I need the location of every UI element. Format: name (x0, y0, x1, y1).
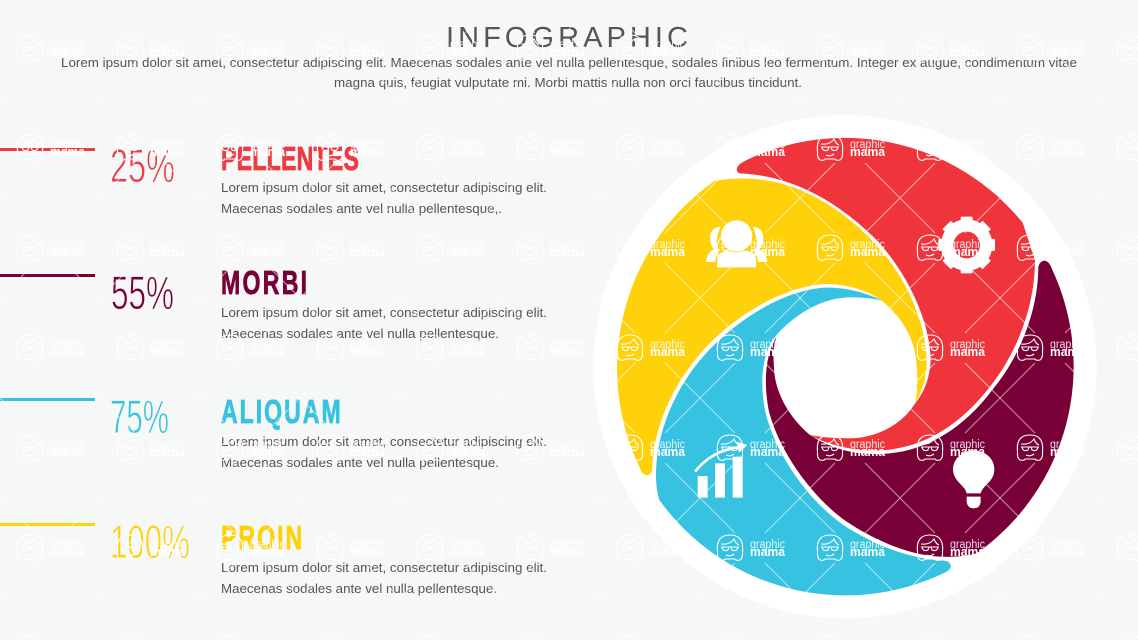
row: Aliquam 75%: Maecenas sodales ante vel nulla pellentesque. (221, 455, 499, 470)
row: Pellentes 25%: 25% (110, 139, 175, 192)
row: Morbi 55%: Lorem ipsum dolor sit amet, consectetur adipiscing elit. (221, 305, 547, 320)
row: Proin 100% (0, 515, 547, 596)
icon: light bulb (953, 451, 994, 508)
row: Aliquam 75%: Lorem ipsum dolor sit amet, consectetur adipiscing elit. (221, 434, 547, 449)
row: Aliquam 75%: ALIQUAM (221, 394, 341, 431)
intro text: Lorem ipsum dolor sit amet, consectetur adipiscing elit. Maecenas sodales ante vel nulla pellentesque, sodales finibus leo fermentum. Integer ex augue, condimentum vitae (61, 55, 1077, 70)
row: Pellentes 25%: PELLENTES (221, 141, 359, 178)
intro text: magna quis, feugiat vulputate mi. Morbi mattis nulla non orci faucibus tincidunt. (334, 75, 802, 90)
row: Aliquam 75% (0, 390, 547, 470)
row: Proin 100%: Maecenas sodales ante vel nulla pellentesque. (221, 581, 497, 596)
segment: red (737, 138, 1035, 451)
row: Pellentes 25% (0, 139, 547, 216)
swirl diagram (593, 115, 1097, 618)
icon: growth chart (695, 442, 747, 498)
intro text (61, 55, 1077, 90)
icon: gear (938, 217, 995, 273)
segment: blue (656, 288, 951, 595)
title: INFOGRAPHIC (446, 22, 688, 54)
icon: people (706, 220, 767, 267)
row: Morbi 55%: Maecenas sodales ante vel nulla pellentesque. (221, 326, 499, 341)
row: Morbi 55%: 55% (111, 266, 174, 319)
row: Morbi 55%: MORBI (221, 265, 307, 302)
segment: yellow (617, 179, 927, 475)
row: Proin 100%: 100% (110, 515, 190, 568)
row: Proin 100%: PROIN (221, 520, 302, 557)
white disc (593, 115, 1097, 618)
row: Proin 100%: Lorem ipsum dolor sit amet, consectetur adipiscing elit. (221, 560, 547, 575)
segment: maroon (766, 261, 1074, 557)
row: Aliquam 75%: 75% (110, 390, 169, 443)
row: Pellentes 25%: Maecenas sodales ante vel nulla pellentesque,. (221, 201, 502, 216)
row: Morbi 55% (0, 265, 547, 341)
row: Pellentes 25%: Lorem ipsum dolor sit amet, consectetur adipiscing elit. (221, 180, 547, 195)
